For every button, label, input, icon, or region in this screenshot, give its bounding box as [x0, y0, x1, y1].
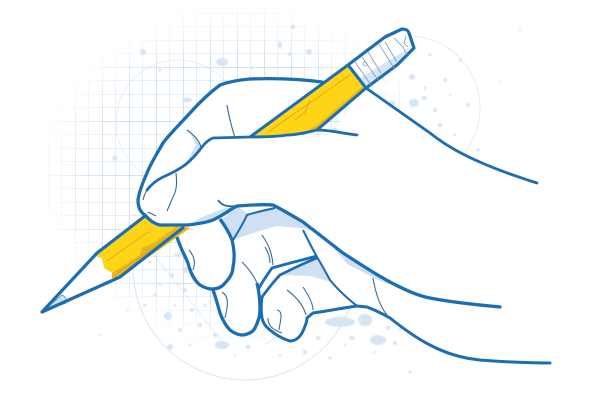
- inner knuckle lines: [233, 208, 357, 306]
- pencil lower outline: [42, 216, 184, 312]
- index finger upper edge: [147, 130, 357, 190]
- fingers fill: [177, 205, 600, 363]
- pencil yellow upper body: [250, 66, 366, 137]
- illustration: hand holding pencil: [40, 6, 552, 380]
- thumb base wrinkle: [218, 200, 237, 206]
- pencil lead tip: [43, 295, 66, 311]
- thin taper: arm top line: [366, 88, 537, 183]
- pencil upper grain lines: [268, 75, 350, 132]
- pinky top double line: [258, 256, 317, 297]
- pencil lower section: [42, 216, 190, 312]
- ferrule body: [348, 29, 414, 88]
- pencil upper darker edge: [300, 87, 366, 135]
- thumb underside shading: [185, 133, 232, 224]
- finger crease lines: [189, 235, 387, 333]
- eraser and ferrule: [348, 29, 414, 88]
- arm, palm and hand fill: [138, 79, 600, 330]
- pinky finger: [261, 297, 550, 363]
- back of hand shading: [222, 128, 425, 297]
- ink splatter: [99, 25, 521, 374]
- pencil darker facet: [112, 227, 190, 278]
- pencil yellow lower body: [95, 216, 190, 278]
- pencil upper outline: [250, 65, 366, 137]
- pencil groove line: [107, 232, 166, 273]
- ferrule details: [355, 36, 408, 85]
- ferrule shading: [360, 47, 411, 86]
- background grid: [40, 6, 429, 344]
- hand outline: top of hand and thumb: [138, 79, 500, 307]
- background circles: [116, 36, 480, 380]
- ring finger: [213, 283, 260, 335]
- thumb crease lines: [143, 105, 235, 216]
- middle finger: [177, 219, 234, 289]
- pencil point wood: [42, 255, 120, 312]
